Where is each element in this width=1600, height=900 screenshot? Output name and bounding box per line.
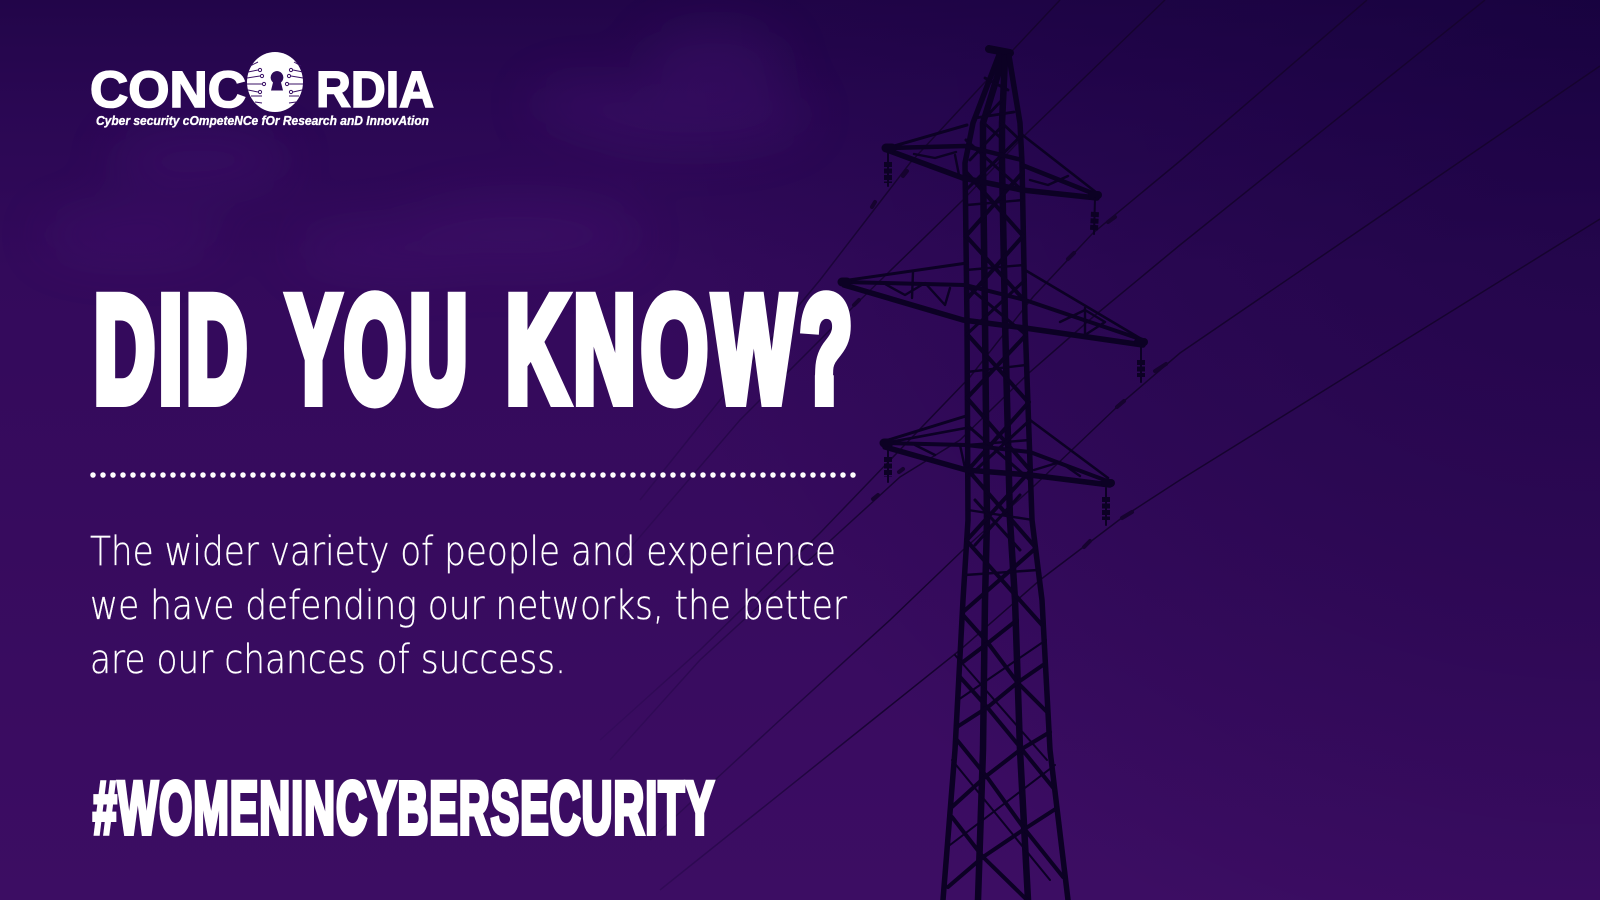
power lines	[600, 0, 1600, 890]
lower cross-arm	[884, 416, 1111, 485]
title: Did you know?: KNOW?	[506, 265, 858, 433]
wire spacer markers	[854, 171, 1166, 547]
logo wordmark left: CONC	[90, 61, 246, 118]
body text: are our chances of success.	[90, 637, 566, 683]
body text: The wider variety of people and experience	[90, 529, 836, 575]
dotted divider	[93, 472, 854, 478]
logo tagline: Cyber security cOmpeteNCe fOr Research anD InnovAtion	[96, 114, 429, 128]
hashtag: #WOMENINCYBERSECURITY	[93, 766, 715, 850]
upper cross-arm	[886, 125, 1098, 198]
logo wordmark right: RDIA	[316, 61, 434, 118]
body text	[90, 529, 847, 683]
title: Did you know?	[94, 265, 858, 433]
lattice bracing	[948, 78, 1063, 900]
title: Did you know?: YOU	[287, 265, 471, 433]
logo: CONCORDIA	[90, 52, 434, 128]
transmission tower	[842, 49, 1144, 900]
middle cross-arm	[842, 263, 1144, 345]
insulator hangers	[888, 150, 1141, 525]
title: Did you know?: DID	[94, 265, 251, 433]
insulators	[888, 162, 1141, 520]
tower legs	[943, 55, 1068, 900]
icon: keyhole globe	[247, 52, 303, 112]
body text: we have defending our networks, the better	[90, 583, 847, 629]
tower top cap	[989, 49, 1010, 53]
